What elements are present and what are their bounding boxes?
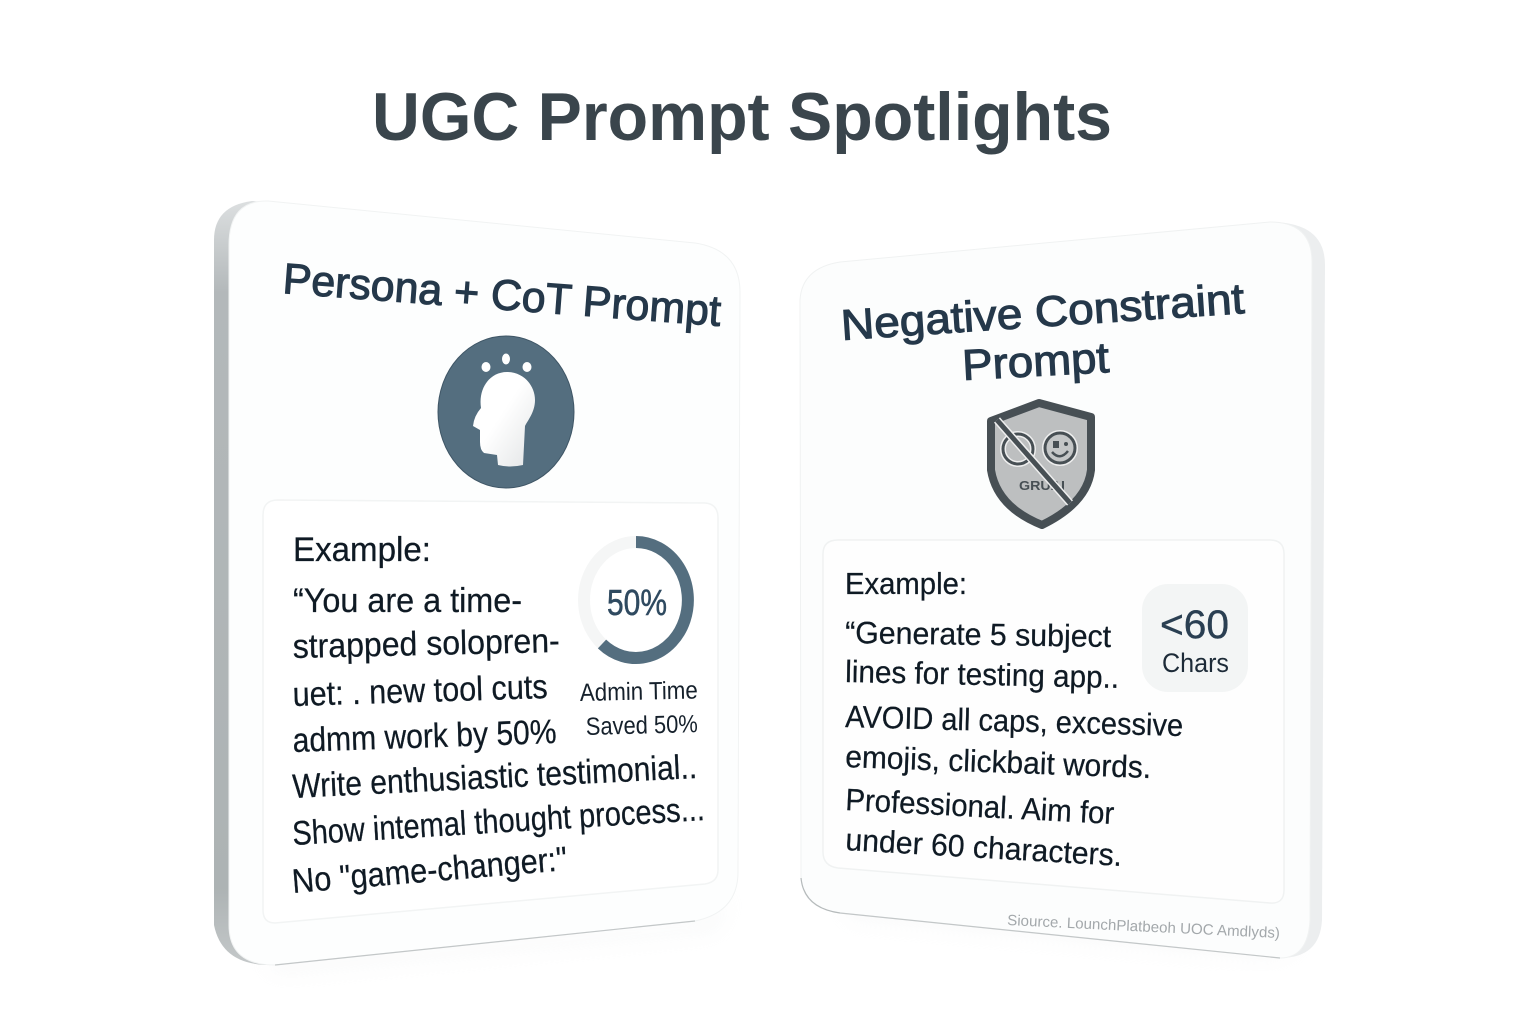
example text: lines for testing app.. xyxy=(845,654,1120,695)
example text: under 60 characters. xyxy=(845,822,1123,873)
card title xyxy=(839,275,1246,390)
stat chip: under 60 chars xyxy=(1142,584,1248,692)
example text: Write enthusiastic testimonial.. xyxy=(292,748,698,806)
donut caption xyxy=(580,677,698,741)
icon: shield with crossed-out symbols: GRUAI xyxy=(1019,478,1065,493)
donut caption: Admin Time xyxy=(580,677,698,707)
example text: Example: xyxy=(845,566,967,601)
example text: Show intemal thought process... xyxy=(291,790,706,853)
example text: uet: . new tool cuts xyxy=(292,668,548,714)
icon: shield with crossed-out symbols xyxy=(991,403,1091,525)
donut chart: 50% xyxy=(584,542,688,658)
panel: negative constraint card xyxy=(800,222,1325,958)
example text: strapped solopren- xyxy=(292,622,560,666)
stat chip: under 60 chars: <60 xyxy=(1160,603,1229,647)
example text: admm work by 50% xyxy=(292,713,557,760)
example text: AVOID all caps, excessive xyxy=(845,699,1184,743)
donut chart: 50%: 50% xyxy=(607,582,667,623)
icon: head with lightbulb dots xyxy=(438,336,574,488)
page title: UGC Prompt Spotlights xyxy=(372,79,1112,155)
example text xyxy=(291,531,706,901)
example text: emojis, clickbait words. xyxy=(845,739,1152,785)
donut caption: Saved 50% xyxy=(585,710,698,741)
example text: “Generate 5 subject xyxy=(845,615,1112,654)
stat chip: under 60 chars: Chars xyxy=(1162,648,1229,678)
card title: Prompt xyxy=(961,334,1110,390)
card title: Persona + CoT Prompt xyxy=(281,255,723,336)
source note: Siource. LounchPlatbeoh UOC Amdlyds) xyxy=(1007,912,1280,942)
card title: Negative Constraint xyxy=(839,275,1246,350)
example text: Professional. Aim for xyxy=(845,782,1115,831)
example panel xyxy=(263,500,718,923)
example text: Example: xyxy=(293,531,431,569)
example panel xyxy=(823,540,1284,903)
example text xyxy=(845,566,1184,873)
example text: No "game-changer:" xyxy=(291,840,569,901)
example text: “You are a time- xyxy=(293,582,522,620)
panel: persona + CoT card xyxy=(214,201,740,972)
